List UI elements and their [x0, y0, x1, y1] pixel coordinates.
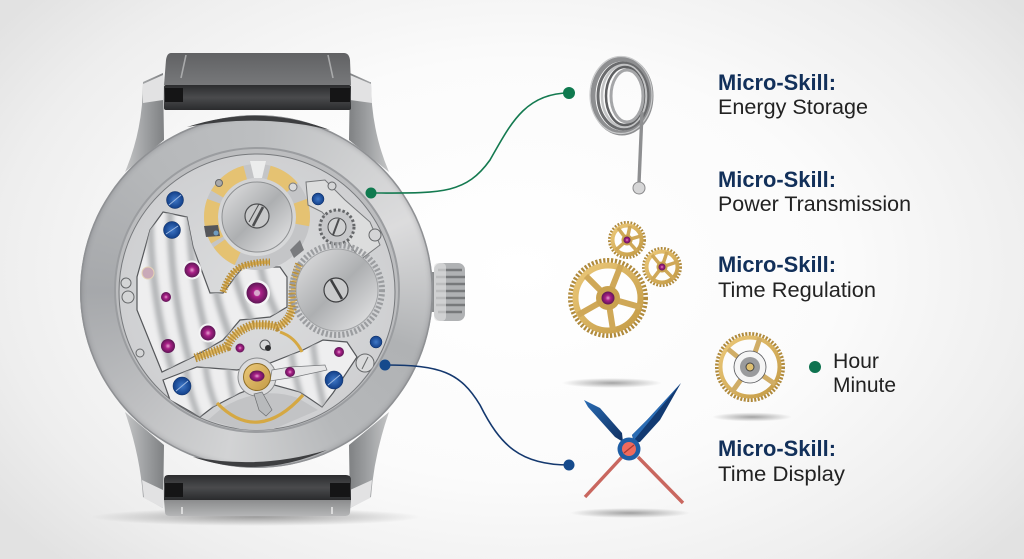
label: time regulation: Time Regulation: [718, 278, 876, 302]
label: hour minute: Hour: [833, 349, 879, 373]
label: energy storage: Energy Storage: [718, 95, 868, 119]
second wheel: [292, 245, 382, 335]
label: power transmission: Micro-Skill:: [718, 167, 836, 192]
movement: [114, 147, 400, 435]
label: energy storage: [718, 70, 868, 119]
hands shadow: [570, 508, 690, 518]
label: time display: Time Display: [718, 462, 845, 486]
watch movement and callouts: [114, 56, 910, 518]
bullet dot: [809, 361, 821, 373]
bottom lugs: [125, 412, 389, 508]
icon: large brass gear: [570, 260, 646, 336]
gold ring under barrel: [204, 161, 304, 263]
top strap: [164, 53, 351, 110]
gold gear train lower: [195, 263, 300, 358]
under-bridge wheel details: [260, 332, 302, 352]
bottom strap: [164, 475, 351, 516]
icon: small brass gear right: [644, 248, 680, 286]
label: time display: [718, 436, 845, 486]
case dark crescents: [187, 116, 330, 467]
blue connector: time display: [380, 360, 574, 470]
label: hour minute: Minute: [833, 373, 896, 397]
wheel shadow: [712, 412, 792, 422]
mainspring barrel: [222, 182, 292, 252]
small plate screws: [121, 182, 381, 357]
top lugs: [125, 73, 389, 172]
label: hour minute: [833, 349, 896, 397]
balance wheel rim: [217, 395, 303, 422]
label: time regulation: [718, 252, 876, 302]
green connector: energy storage: [366, 87, 575, 198]
label: time regulation: Micro-Skill:: [718, 252, 836, 277]
crown: [428, 263, 465, 321]
upper bridge right: [306, 180, 380, 260]
label: energy storage: Micro-Skill:: [718, 70, 836, 95]
lower striped bridge: [163, 335, 357, 420]
watch ground shadow: [91, 508, 421, 526]
icon: small brass gear top: [610, 222, 644, 258]
gears shadow: [562, 378, 662, 388]
balance recess: [208, 393, 318, 430]
label: power transmission: [718, 167, 911, 216]
label: time display: Micro-Skill:: [718, 436, 836, 461]
icon: watch hands: [584, 383, 683, 503]
icon: mainspring coil: [590, 56, 652, 194]
ruby jewels: [142, 260, 344, 377]
icon: escapement wheel: [717, 334, 783, 400]
watch case: [80, 115, 433, 468]
right small screw: [356, 354, 374, 372]
balance cock and jewel: [238, 358, 327, 416]
main striped plate: [137, 210, 287, 380]
blue screws: [164, 192, 382, 395]
label: power transmission: Power Transmission: [718, 192, 911, 216]
small click wheel: [320, 210, 354, 244]
gold gear train upper: [223, 262, 270, 292]
